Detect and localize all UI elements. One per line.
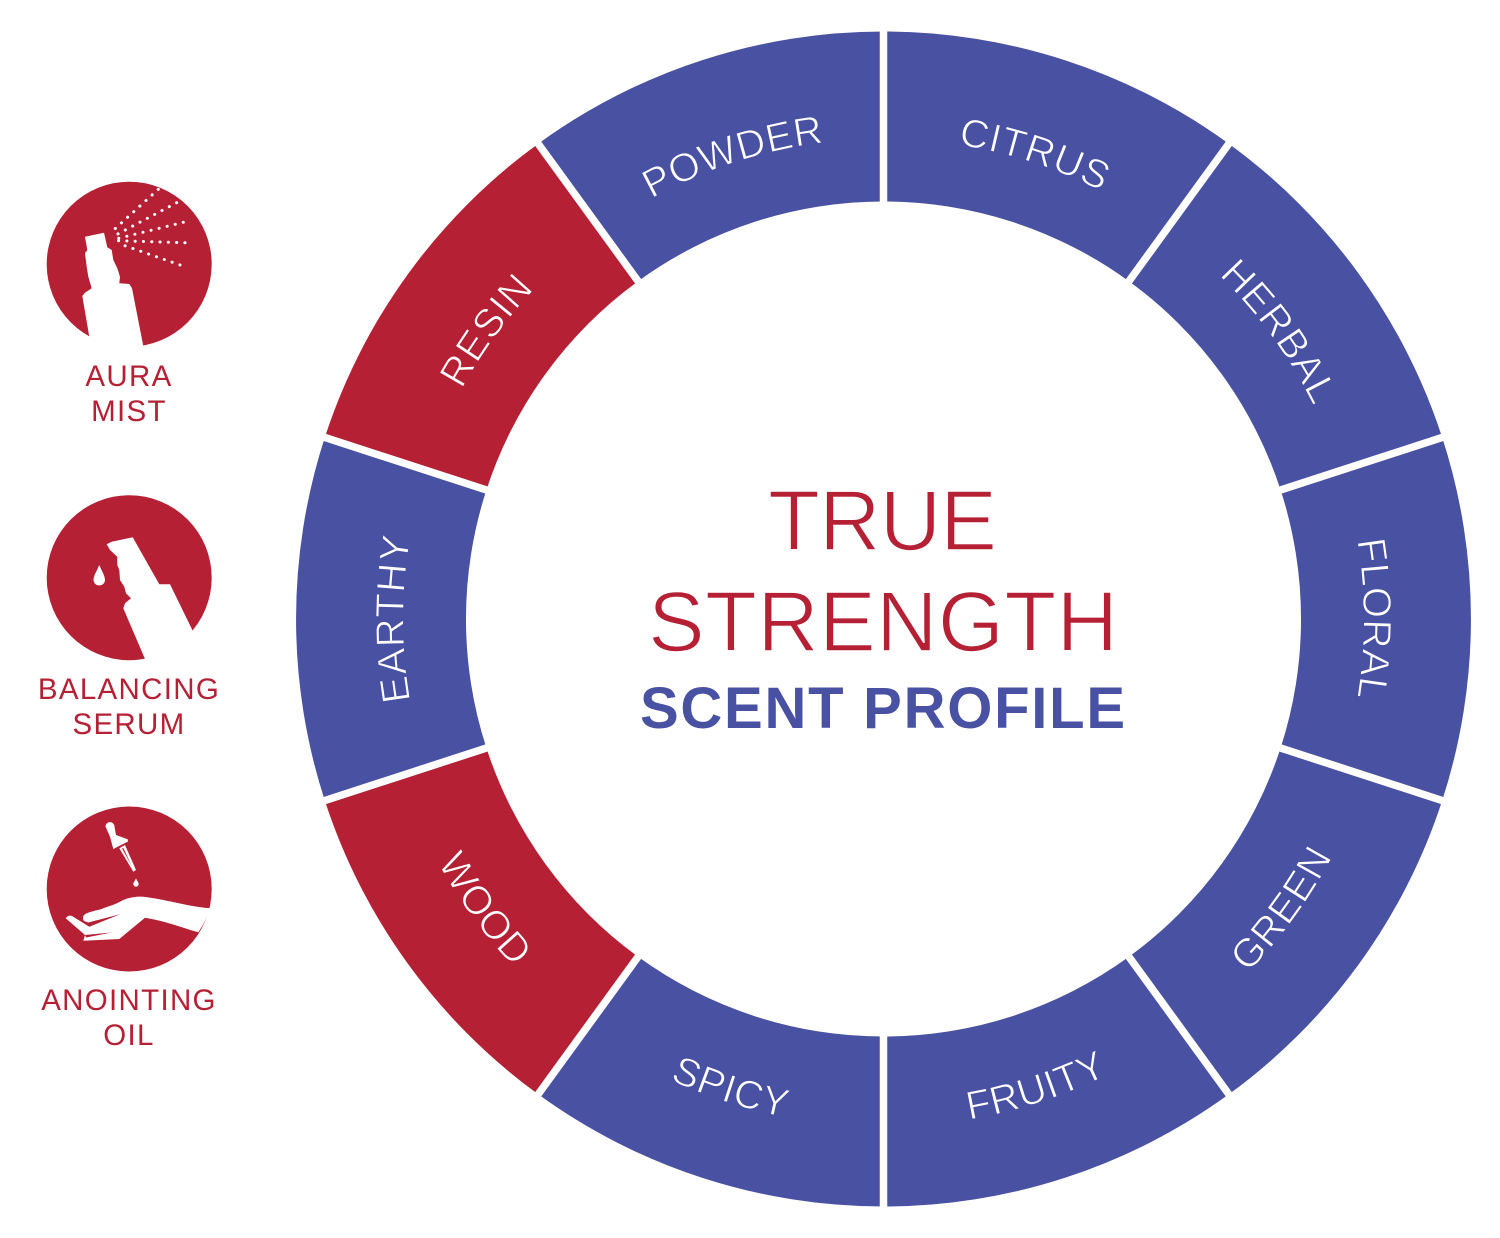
segment: floral: FLORAL — [1358, 540, 1391, 696]
segment: wood — [326, 752, 635, 1092]
label: aura mist: MIST — [91, 395, 167, 428]
icon: serum bottle — [47, 495, 212, 660]
segment: fruity: FRUITY — [967, 1050, 1098, 1119]
scent wheel — [296, 32, 1471, 1206]
product: balancing serum — [38, 495, 220, 741]
product: aura mist — [47, 182, 212, 428]
icon: dropper over hand — [47, 806, 212, 972]
product: anointing oil — [41, 806, 217, 1052]
segment: herbal: HERBAL — [1222, 259, 1330, 404]
label: anointing oil: OIL — [103, 1019, 155, 1052]
label: aura mist: AURA — [85, 360, 173, 393]
title: strength: STRENGTH — [648, 575, 1118, 670]
segment: powder: POWDER — [642, 117, 822, 196]
segment: resin — [326, 146, 635, 486]
segment: citrus — [887, 32, 1226, 279]
segment: spicy — [541, 958, 880, 1206]
subtitle: scent profile: SCENT PROFILE — [640, 676, 1125, 741]
segment: spicy: SPICY — [674, 1058, 790, 1114]
icon: spray bottle — [47, 182, 212, 347]
segment: green — [1132, 752, 1441, 1092]
segment: resin: RESIN — [440, 274, 532, 386]
segment: wood: WOOD — [442, 849, 528, 960]
label: balancing serum: BALANCING — [38, 673, 220, 706]
segment: green: GREEN — [1234, 846, 1330, 966]
segment: herbal — [1132, 146, 1441, 486]
center title — [640, 474, 1125, 741]
segment: fruity — [887, 958, 1226, 1206]
title: true: TRUE — [768, 474, 997, 569]
segment: floral — [1282, 441, 1471, 797]
segment: citrus: CITRUS — [962, 120, 1108, 188]
segment: earthy: EARTHY — [376, 536, 410, 702]
segment: earthy — [296, 441, 486, 797]
label: balancing serum: SERUM — [72, 708, 186, 741]
label: anointing oil: ANOINTING — [41, 984, 217, 1017]
segment: powder — [541, 32, 880, 279]
